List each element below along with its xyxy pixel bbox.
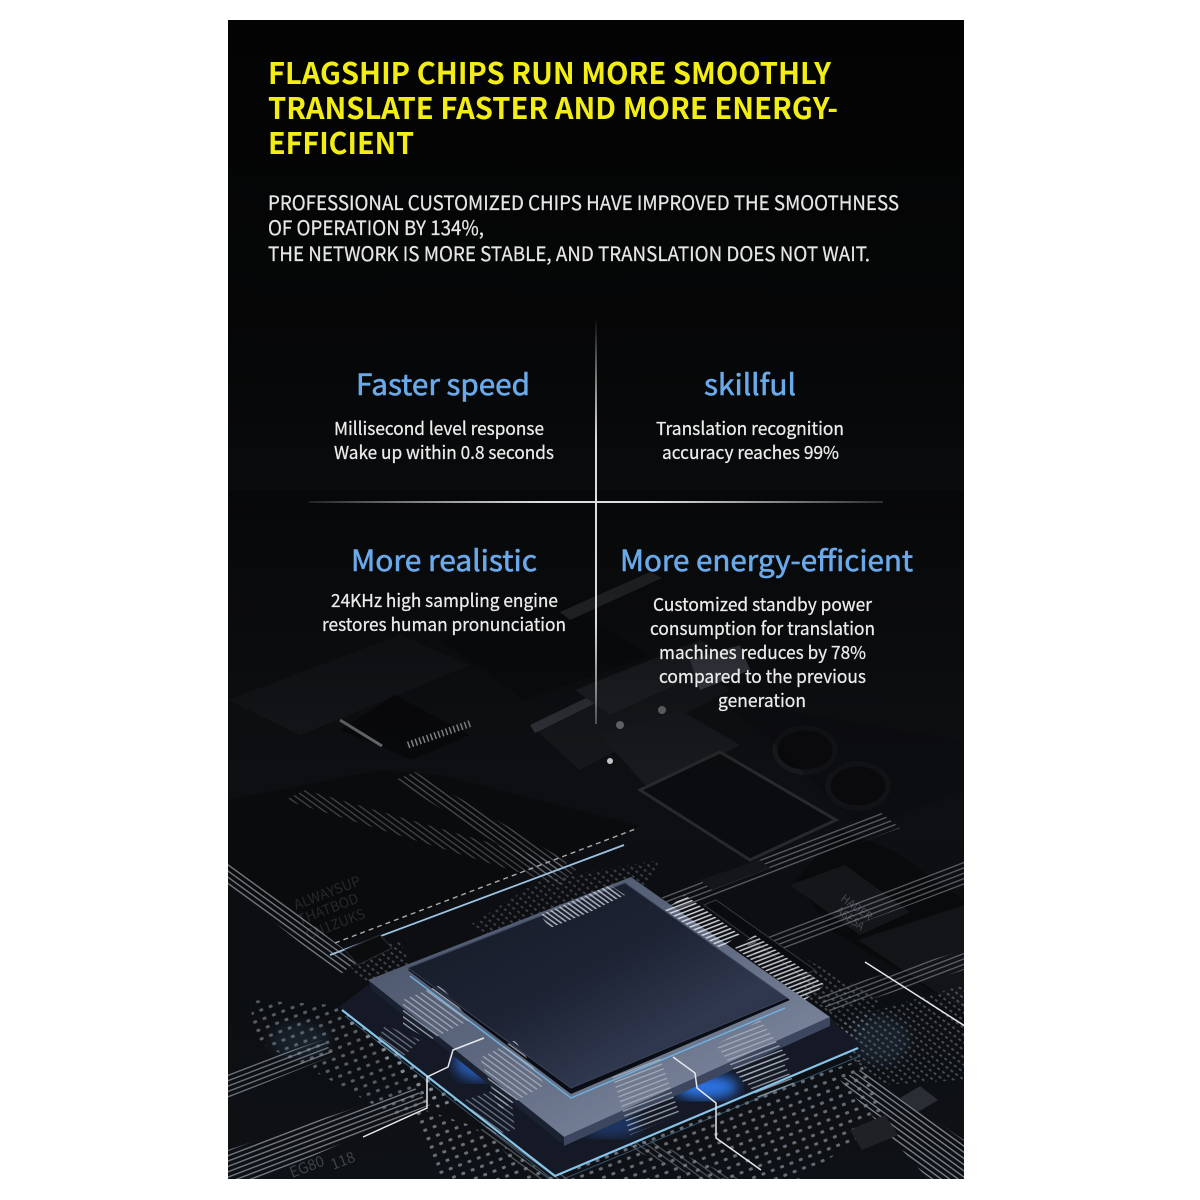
text: skillful detail: Translation recognition	[656, 415, 844, 441]
white callout line: left	[363, 1038, 484, 1137]
title	[268, 49, 838, 163]
circuit board illustration	[228, 572, 964, 1179]
trace bundles running up-right	[660, 812, 900, 912]
white pin combs on package	[540, 885, 625, 928]
text: energy-efficient detail: Customized standby power	[653, 591, 873, 617]
heading: faster speed: Faster speed	[356, 362, 530, 404]
feature: more realistic	[322, 538, 566, 637]
die	[408, 970, 790, 1094]
intro paragraph: PROFESSIONAL CUSTOMIZED CHIPS HAVE IMPROVED THE SMOOTHNESS	[268, 187, 899, 216]
die glowing edge	[410, 976, 785, 1098]
vertical divider	[595, 318, 597, 724]
chip label text: A6E5A	[833, 902, 868, 934]
chip package	[339, 877, 861, 1175]
heading: more realistic: More realistic	[351, 538, 537, 580]
chip label text: THATBOD	[295, 888, 361, 930]
intro paragraph: THE NETWORK IS MORE STABLE, AND TRANSLATION DOES NOT WAIT.	[268, 238, 870, 267]
chip label text	[296, 876, 872, 938]
text: more realistic detail	[322, 587, 566, 637]
blue glow windows	[449, 1050, 492, 1084]
chip label text: ALWAYSUP	[291, 871, 364, 915]
engraved text bottom left: EG80	[286, 1150, 327, 1183]
text: more realistic detail: 24KHz high sampling engine	[331, 587, 558, 613]
intro paragraph: OF OPERATION BY 134%,	[268, 212, 484, 241]
chip label text: HADER	[838, 890, 876, 924]
flat connector	[704, 900, 815, 976]
feature: more energy-efficient	[620, 538, 913, 713]
panel: black background	[228, 20, 964, 1179]
white callout line: right	[673, 1057, 761, 1170]
small black components	[345, 935, 392, 965]
text: more realistic detail: restores human pronunciation	[322, 611, 566, 637]
title: TRANSLATE FASTER AND MORE ENERGY-	[268, 84, 838, 128]
text: skillful detail: accuracy reaches 99%	[662, 439, 839, 465]
text: energy-efficient detail: machines reduces by 78%	[659, 639, 866, 665]
circuit glow	[270, 1022, 330, 1058]
dashed and light-blue rails	[335, 828, 638, 943]
infographic poster	[228, 20, 964, 1179]
engraved text bottom left: 118	[327, 1146, 358, 1175]
faint upper board components	[339, 572, 839, 862]
right dark components	[796, 830, 964, 1010]
feature: skillful	[656, 362, 844, 465]
top darkening overlay	[340, 572, 750, 764]
text: energy-efficient detail: generation	[718, 687, 806, 713]
heading: more energy-efficient: More energy-efficient	[620, 538, 913, 580]
intro paragraph	[268, 187, 899, 267]
solder dot and circuit fields	[250, 1000, 445, 1120]
text: faster speed detail: Wake up within 0.8 seconds	[334, 439, 554, 465]
text: faster speed detail	[334, 415, 554, 465]
text: energy-efficient detail: compared to the previous	[659, 663, 866, 689]
package lower tier	[340, 984, 860, 1174]
feature: faster speed	[334, 362, 554, 465]
text: energy-efficient detail: consumption for translation	[650, 615, 875, 641]
white callout line: far right	[865, 962, 968, 1028]
text: skillful detail	[656, 415, 844, 465]
text: faster speed detail: Millisecond level response	[334, 415, 544, 441]
text: energy-efficient detail	[650, 591, 875, 713]
engraved text bottom left	[290, 1152, 355, 1178]
chip label text: CN1ZUKS	[303, 904, 368, 945]
trace bundles running down-right	[285, 790, 578, 885]
heading: skillful: skillful	[704, 362, 796, 404]
horizontal divider	[309, 501, 883, 503]
package upper tier	[368, 877, 830, 1137]
title: EFFICIENT	[268, 119, 414, 163]
title: FLAGSHIP CHIPS RUN MORE SMOOTHLY	[268, 49, 832, 93]
light-blue substrate edge	[342, 1010, 858, 1176]
big dark ram chip	[228, 770, 640, 945]
